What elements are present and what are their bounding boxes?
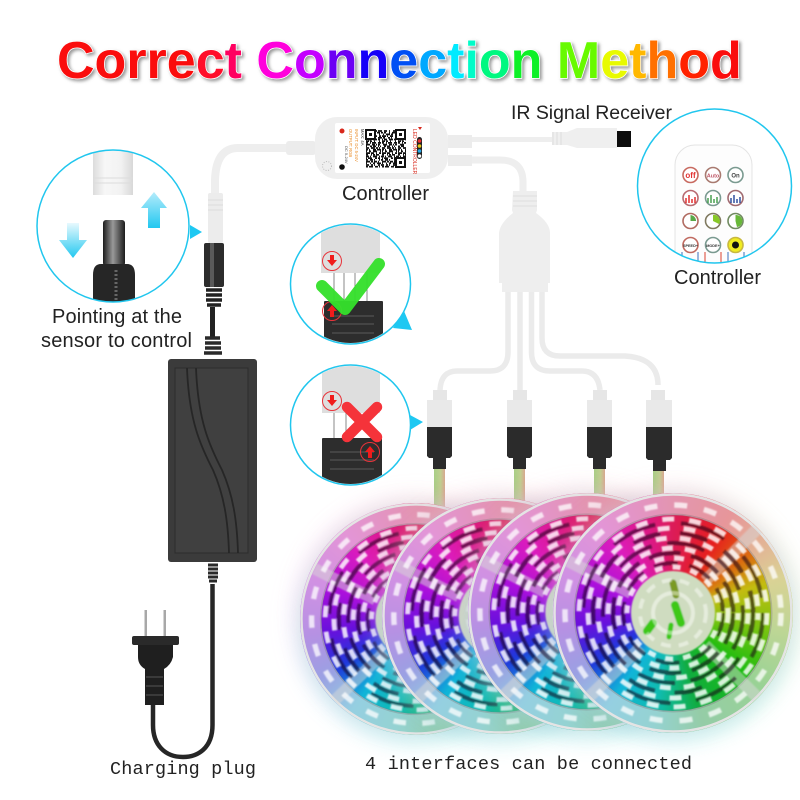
controller label sticker bbox=[335, 123, 430, 175]
wall plug bbox=[132, 610, 179, 705]
LED strip reel 1 bbox=[300, 503, 532, 735]
title: Correct Connection Method bbox=[57, 32, 742, 90]
button graphics bbox=[682, 195, 744, 266]
cable from controller to splitter bbox=[448, 155, 523, 195]
remote buttons bbox=[683, 168, 743, 252]
button labels: off bbox=[685, 171, 696, 180]
remote body bbox=[674, 144, 752, 252]
button labels bbox=[683, 171, 740, 248]
QR code bbox=[366, 130, 406, 167]
IR signal receiver label: IR Signal Receiver bbox=[511, 102, 672, 124]
adapter lower strain relief bbox=[208, 565, 218, 581]
controller box bbox=[286, 117, 448, 179]
LED strip reel 4 bbox=[553, 493, 793, 733]
red arrow badges bbox=[322, 252, 342, 320]
black plug close-up bbox=[93, 220, 135, 305]
pointer bbox=[393, 311, 412, 330]
connector 1 bbox=[427, 390, 452, 507]
button labels: On bbox=[731, 174, 740, 180]
red cross mark bbox=[347, 407, 377, 437]
sensor caption: Pointing at the bbox=[52, 306, 182, 328]
power adapter and plug bbox=[132, 359, 257, 757]
connector 3 bbox=[587, 390, 612, 497]
white DC socket bbox=[208, 193, 223, 243]
microphone dots bbox=[322, 162, 332, 170]
sensor caption bbox=[41, 306, 192, 352]
panel: remote control zoom bbox=[636, 108, 792, 264]
white socket close-up bbox=[93, 151, 133, 195]
panel: pointing at sensor zoom bbox=[37, 145, 202, 305]
power cable from controller to DC connector bbox=[204, 148, 300, 353]
black DC plug bbox=[204, 243, 224, 353]
LED strip reel 2 bbox=[382, 498, 618, 734]
green check mark bbox=[322, 264, 379, 309]
sensor caption: sensor to control bbox=[41, 330, 192, 352]
LED strip reel 3 bbox=[468, 493, 706, 731]
splitter body bbox=[499, 191, 550, 292]
pointer bbox=[190, 225, 202, 239]
pointer bbox=[410, 415, 423, 430]
interfaces caption: 4 interfaces can be connected bbox=[365, 754, 692, 775]
controller label sticker: MAX: 4A bbox=[360, 129, 365, 146]
adapter body bbox=[168, 359, 257, 562]
button labels: SPEED+ bbox=[683, 244, 699, 248]
arrow down bbox=[59, 223, 87, 258]
controller label left: Controller bbox=[342, 183, 429, 205]
controller label sticker: INPUT: DC 5-24V bbox=[354, 129, 359, 162]
IR receiver cable and head bbox=[448, 128, 631, 148]
button labels: MODE+ bbox=[706, 244, 721, 248]
panel: correct connection bbox=[290, 222, 412, 346]
panel: wrong connection bbox=[290, 360, 423, 488]
controller label sticker: DC 5-24V bbox=[344, 146, 349, 164]
connector 4 bbox=[646, 390, 672, 497]
connector 2 bbox=[507, 390, 532, 501]
controller label sticker: LED CONTROLLER bbox=[411, 129, 417, 175]
remote controller label: Controller bbox=[674, 267, 761, 289]
splitter with four wires bbox=[440, 191, 658, 392]
four white wires bbox=[440, 290, 658, 392]
red arrow badges bbox=[322, 392, 380, 462]
charging plug caption: Charging plug bbox=[110, 759, 256, 780]
adapter cord bbox=[153, 584, 212, 757]
button labels: Auto bbox=[707, 174, 720, 180]
connector heads bbox=[427, 390, 672, 507]
arrow up bbox=[141, 192, 167, 228]
controller label sticker: OUTPUT: RGB bbox=[348, 129, 353, 157]
